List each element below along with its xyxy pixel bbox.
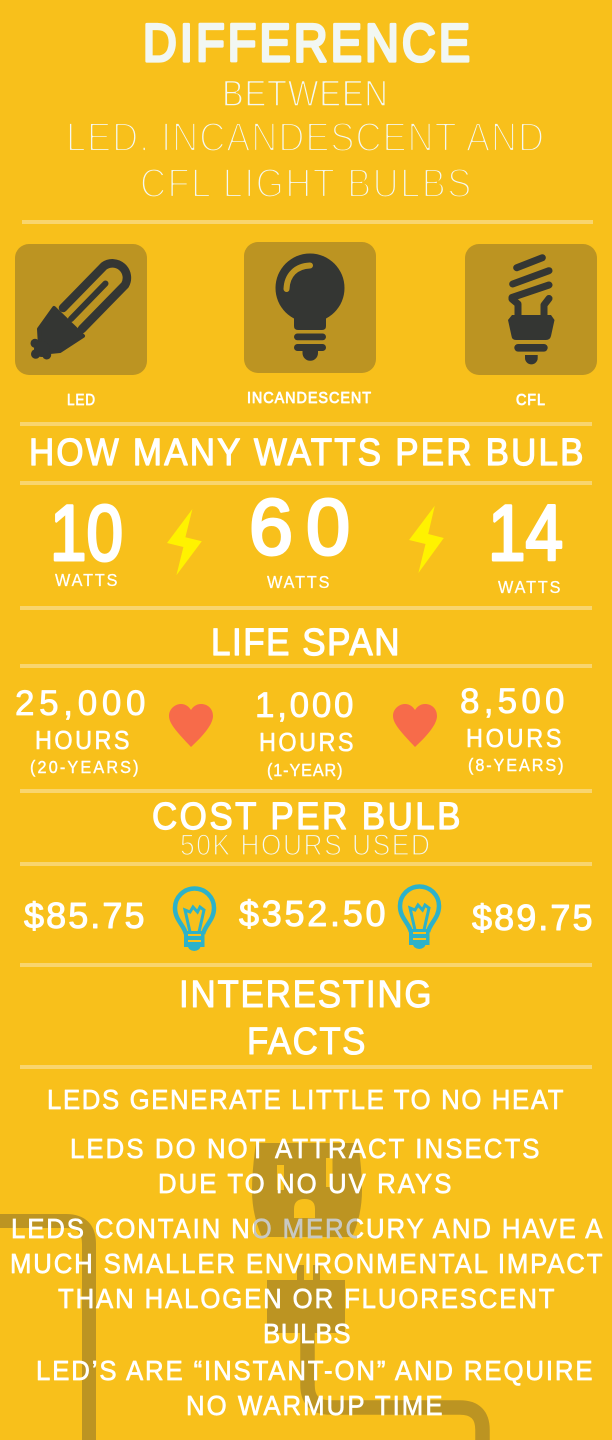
stat: LED life span [15,684,146,777]
icon: lightning bolt [167,509,202,575]
stat: LED life span: HOURS [35,727,130,755]
background illustration: outlet and plug [0,1143,482,1440]
fact: insects: LEDS DO NOT ATTRACT INSECTS [70,1133,539,1164]
fact: mercury: BULBS [263,1318,350,1349]
stat: CFL 14 watts: WATTS [498,577,560,597]
panel: cost [24,886,592,951]
fact: instant on: NO WARMUP TIME [186,1390,442,1421]
plug [267,1265,345,1333]
stat: incandescent life span: (1-YEAR) [267,760,343,780]
panel: CFL bulb [465,244,597,409]
icon: heart [169,704,213,747]
stat: incandescent 60 watts: WATTS [267,572,329,592]
fact: mercury: LEDS CONTAIN NO MERCURY AND HAVE A [11,1213,603,1244]
outlet [252,1143,362,1237]
heading: how many watts per bulb: HOW MANY WATTS PER BULB [29,431,583,473]
heading: difference: DIFFERENCE [143,13,470,73]
stat: LED life span: (20-YEARS) [30,757,139,777]
heading: interesting facts: FACTS [247,1020,365,1062]
stat: CFL life span: (8-YEARS) [468,755,563,775]
icon: blue light bulb [175,888,214,951]
stat: CFL life span: HOURS [466,725,561,753]
heading: life span: LIFE SPAN [211,621,400,663]
stat: CFL 14 watts: 14 [488,488,563,577]
stat: LED 10 watts: 10 [50,488,123,577]
stat: LED cost: $85.75 [24,895,144,936]
stat: incandescent life span: HOURS [259,729,354,757]
fact: mercury: THAN HALOGEN OR FLUORESCENT [58,1283,555,1314]
panel: incandescent bulb [244,242,376,407]
heading: interesting facts [179,973,432,1062]
label: CFL: CFL [516,391,545,409]
subheading: bulb types line 2: CFL LIGHT BULBS [140,161,471,207]
stat: LED 10 watts: WATTS [55,570,117,590]
icon: heart [393,704,437,747]
left cord [0,1221,89,1440]
fact: heat: LEDS GENERATE LITTLE TO NO HEAT [47,1084,563,1115]
heading: interesting facts: INTERESTING [179,973,432,1015]
fact: instant on: LED’S ARE “INSTANT-ON” AND REQUIRE [36,1355,593,1386]
stat: LED life span: 25,000 [15,684,146,723]
stat: CFL life span: 8,500 [460,682,564,721]
stat: CFL life span [460,682,564,775]
panel: life span [15,682,564,780]
icon tile: LED [15,244,147,375]
panel: LED bulb [15,244,147,409]
subheading: between: BETWEEN [222,73,388,114]
label: LED: LED [67,392,95,409]
stat: incandescent cost: $352.50 [239,893,386,934]
label: incandescent: INCANDESCENT [247,389,371,407]
title [66,13,544,207]
plug cord [308,1333,482,1440]
fact: mercury [10,1213,603,1349]
icon tile: CFL [465,244,597,375]
fact: insects [70,1133,539,1199]
subheading: bulb types line 1: LED, INCANDESCENT AND [66,115,544,161]
fact: instant on [36,1355,593,1421]
fact: insects: DUE TO NO UV RAYS [158,1168,451,1199]
heading: cost per bulb: COST PER BULB [152,795,460,837]
stat: incandescent life span: 1,000 [255,686,354,725]
stat: incandescent 60 watts: 60 [249,482,350,571]
icon tile: incandescent [244,242,376,373]
icon: blue light bulb [400,886,439,949]
stat: incandescent life span [255,686,354,780]
panel: interesting facts [10,1084,603,1421]
subheading: 50k hours used: 50K HOURS USED [180,827,430,861]
fact: mercury: MUCH SMALLER ENVIRONMENTAL IMPACT [10,1248,602,1279]
panel: watts [50,482,563,597]
icon: lightning bolt [409,506,444,573]
heading: cost per bulb [152,795,460,861]
stat: CFL cost: $89.75 [472,897,592,938]
